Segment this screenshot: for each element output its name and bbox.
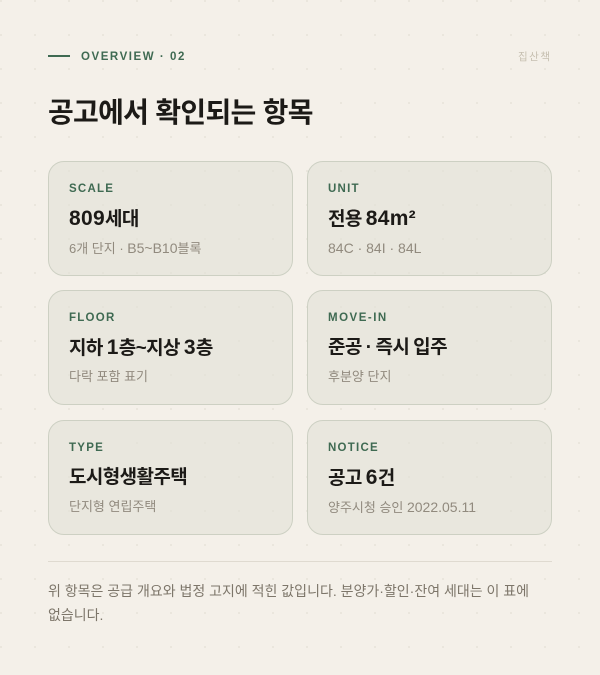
label: unit: UNIT bbox=[328, 183, 360, 195]
value: type: 도시형생활주택 bbox=[69, 467, 187, 488]
eyebrow rule bbox=[48, 55, 70, 57]
value: floor: 지하 1층~지상 3층 bbox=[69, 336, 213, 359]
value: scale: 809세대 bbox=[69, 207, 139, 230]
label: scale: SCALE bbox=[69, 183, 114, 195]
label: floor: FLOOR bbox=[69, 312, 116, 324]
eyebrow label: OVERVIEW · 02 bbox=[81, 51, 186, 63]
label: type: TYPE bbox=[69, 442, 104, 454]
footnote: 없습니다. bbox=[48, 607, 103, 623]
label: move-in: MOVE-IN bbox=[328, 312, 388, 324]
title: 공고에서 확인되는 항목 bbox=[48, 97, 313, 128]
detail: type: 단지형 연립주택 bbox=[69, 499, 156, 514]
detail: move-in: 후분양 단지 bbox=[328, 369, 391, 384]
card: move-in bbox=[307, 290, 552, 405]
value: notice: 공고 6건 bbox=[328, 466, 395, 489]
brand mark: 집산책 bbox=[518, 51, 551, 63]
footnote: 위 항목은 공급 개요와 법정 고지에 적힌 값입니다. 분양가·할인·잔여 세대는 이 표에 bbox=[48, 583, 529, 599]
detail: notice: 양주시청 승인 2022.05.11 bbox=[328, 499, 476, 515]
card: floor bbox=[48, 290, 293, 405]
detail: floor: 다락 포함 표기 bbox=[69, 369, 148, 384]
label: notice: NOTICE bbox=[328, 442, 379, 454]
detail: unit: 84C · 84I · 84L bbox=[328, 240, 421, 256]
card: type bbox=[48, 420, 293, 535]
card: notice bbox=[307, 420, 552, 535]
value: unit: 전용 84m² bbox=[328, 207, 416, 230]
card: unit bbox=[307, 161, 552, 276]
footnote bbox=[48, 583, 529, 623]
detail: scale: 6개 단지 · B5~B10블록 bbox=[69, 240, 201, 256]
card: scale bbox=[48, 161, 293, 276]
value: move-in: 준공 · 즉시 입주 bbox=[328, 337, 447, 358]
